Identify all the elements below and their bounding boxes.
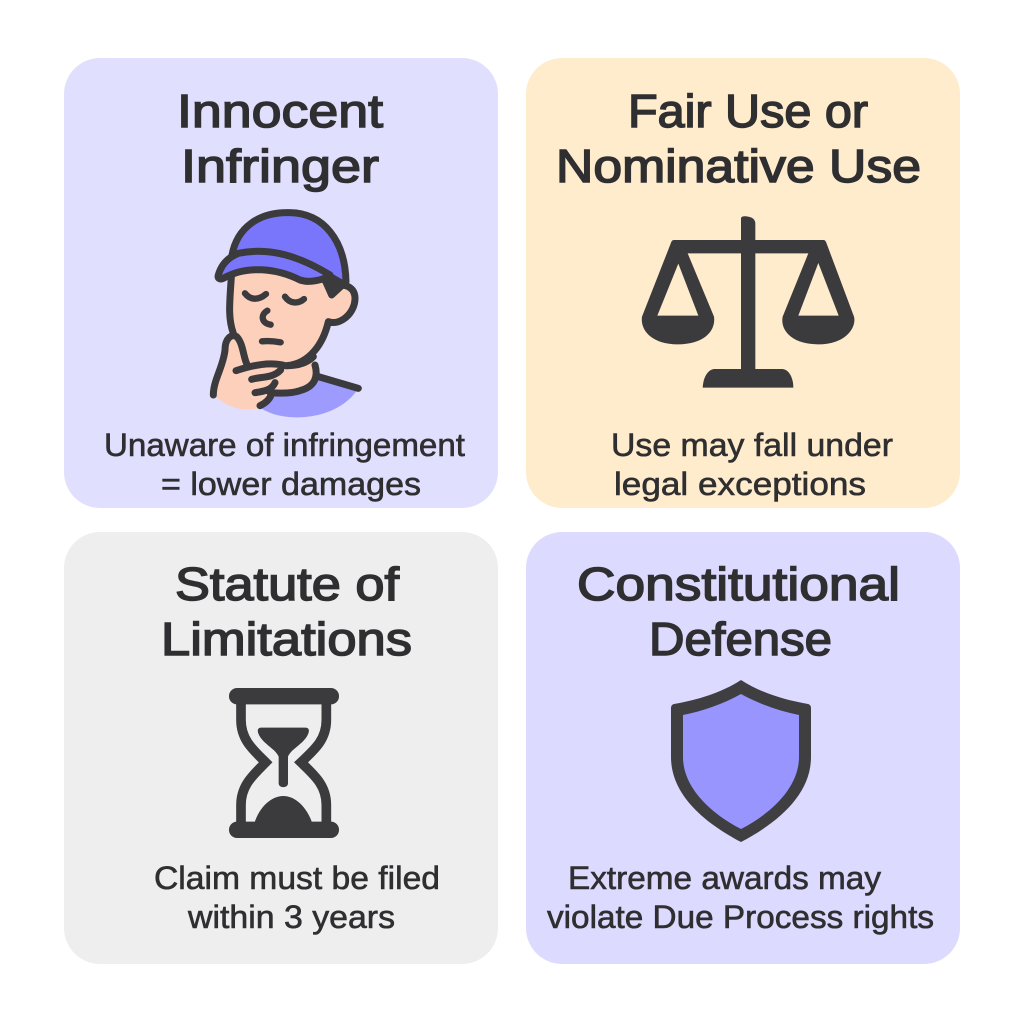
icon: balance scales bbox=[642, 216, 854, 388]
heading: Fair Use or Nominative Use bbox=[556, 85, 921, 192]
heading: Statute of Limitations bbox=[161, 558, 412, 665]
heading: Innocent Infringer bbox=[177, 85, 383, 192]
heading: Innocent Infringer: Infringer bbox=[181, 140, 379, 192]
icon: thinking man with cap bbox=[213, 213, 358, 417]
heading: Constitutional Defense: Constitutional bbox=[577, 558, 900, 610]
caption: Statute of Limitations: Claim must be filed bbox=[154, 860, 440, 896]
caption: Constitutional Defense bbox=[547, 860, 934, 935]
panel: Statute of Limitations bbox=[64, 532, 498, 964]
panel: Innocent Infringer bbox=[64, 58, 498, 508]
heading: Statute of Limitations: Statute of bbox=[175, 558, 399, 610]
panel: Constitutional Defense bbox=[526, 532, 960, 964]
caption: Statute of Limitations: within 3 years bbox=[187, 899, 395, 935]
caption: Constitutional Defense: Extreme awards may bbox=[568, 860, 881, 896]
caption: Innocent Infringer bbox=[104, 427, 465, 502]
heading: Constitutional Defense bbox=[577, 558, 900, 665]
caption: Fair Use or Nominative Use bbox=[611, 427, 893, 502]
heading: Statute of Limitations: Limitations bbox=[161, 613, 412, 665]
caption: Fair Use or Nominative Use: legal exceptions bbox=[614, 466, 866, 502]
heading: Fair Use or Nominative Use: Nominative Use bbox=[556, 140, 921, 192]
caption: Fair Use or Nominative Use: Use may fall under bbox=[611, 427, 893, 463]
heading: Innocent Infringer: Innocent bbox=[177, 85, 383, 137]
heading: Constitutional Defense: Defense bbox=[649, 613, 832, 665]
icon: shield bbox=[671, 680, 811, 842]
panel: Fair Use or Nominative Use bbox=[526, 58, 960, 508]
caption: Statute of Limitations bbox=[154, 860, 440, 935]
caption: Constitutional Defense: violate Due Process rights bbox=[547, 899, 934, 935]
caption: Innocent Infringer: Unaware of infringement bbox=[104, 427, 465, 463]
heading: Fair Use or Nominative Use: Fair Use or bbox=[628, 85, 868, 137]
icon: hourglass bbox=[229, 688, 339, 838]
caption: Innocent Infringer: = lower damages bbox=[161, 466, 421, 502]
